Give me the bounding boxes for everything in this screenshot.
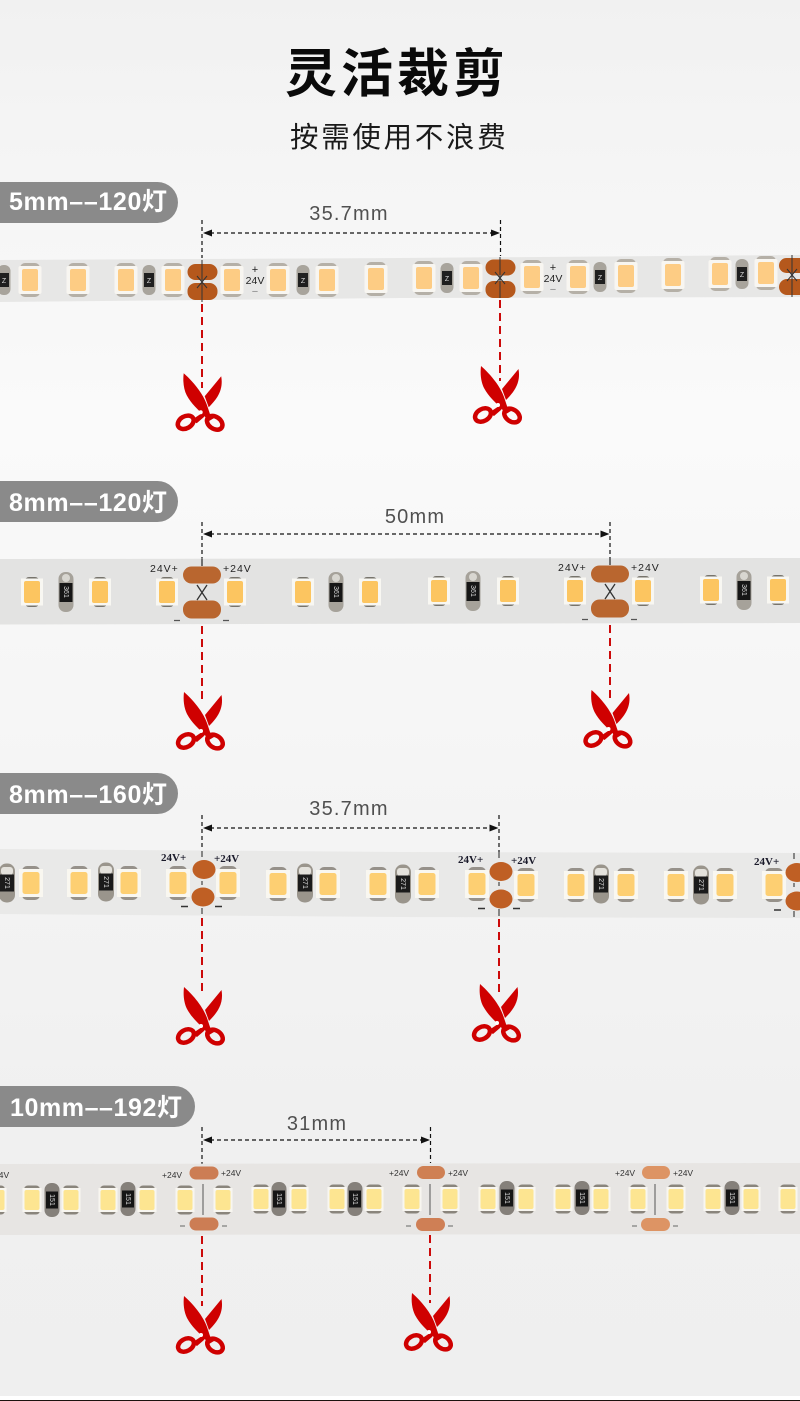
voltage labels: +24V [615,1168,635,1178]
copper pads [192,860,800,910]
LED strip 4 [0,1163,800,1235]
LEDs [21,575,789,607]
pill label: 8mm--160灯 [0,773,178,814]
voltage marks: 24V [544,273,562,285]
cut line and scissors right [583,625,633,749]
voltage labels [150,562,660,620]
resistors: 151 [351,1193,358,1205]
voltage labels: 24V+ [150,563,179,575]
pill label: 8mm--120灯: 8mm––120灯 [9,489,167,517]
resistors: Z [147,278,152,285]
LED strip 3 [0,849,800,918]
voltage labels: +24V [389,1168,409,1178]
voltage labels: 24V+ [458,854,483,866]
dimension: 31mm [202,1113,430,1164]
resistors: Z [598,275,603,282]
cut line and scissors left [175,304,225,433]
voltage labels: +24V [673,1168,693,1178]
resistors [0,259,748,295]
resistors: 271 [597,878,604,890]
resistors [44,1181,740,1217]
dimension: 50mm [202,506,610,559]
pill label: 10mm--192灯: 10mm––192灯 [10,1094,182,1122]
cut marks [197,255,797,302]
voltage marks: + [252,264,258,276]
section: 5mm 120 LEDs [0,182,800,433]
resistors: 151 [503,1192,510,1204]
resistors [0,862,709,904]
cut marks [202,851,794,917]
resistors: 361 [740,584,747,596]
voltage marks: 24V [246,275,264,287]
pill label: 5mm--120灯: 5mm––120灯 [9,188,167,216]
resistors: 271 [3,877,10,889]
voltage labels: 24V+ [161,852,186,864]
resistors: 271 [102,876,109,888]
LEDs [18,256,778,297]
voltage labels: +24V [448,1168,468,1178]
resistors: 361 [332,586,339,598]
dimension: 35.7mm [202,798,499,852]
voltage marks [246,262,562,298]
LED strip 2 [0,558,800,624]
resistors: 271 [399,878,406,890]
resistors: 151 [578,1192,585,1204]
resistors: 151 [728,1192,735,1204]
resistors: Z [445,276,450,283]
subtitle: 按需使用不浪费 [290,115,508,156]
LEDs [0,1184,798,1214]
dimension: 35.7mm [202,203,500,258]
cut line and scissors left [176,918,225,1046]
voltage labels: +24V [511,855,536,867]
resistors: 151 [48,1194,55,1206]
voltage labels: 24V+ [754,856,779,868]
section: 8mm 160 LEDs [0,773,800,1046]
cut line and scissors right [473,300,522,425]
section: 8mm 120 LEDs [0,481,800,751]
resistors: 271 [697,879,704,891]
voltage labels [161,852,781,910]
voltage labels: +24V [223,563,252,575]
LEDs [19,866,786,902]
voltage labels: +24V [214,853,239,865]
cut line and scissors right [472,919,521,1043]
voltage marks: + [550,262,556,274]
resistors: Z [301,278,306,285]
copper pads [190,1166,670,1231]
cut marks [203,1184,655,1215]
dimension: 35.7mm: 35.7mm [309,798,389,820]
pill label: 8mm--120灯 [0,481,178,522]
resistors: 361 [62,586,69,598]
voltage labels [0,1168,693,1226]
pill label: 8mm--160灯: 8mm––160灯 [9,781,167,809]
cut line and scissors left [176,1236,225,1355]
LED strip 1 [0,255,800,302]
resistors: 361 [469,585,476,597]
resistors: Z [740,272,745,279]
dimension: 31mm: 31mm [287,1113,347,1135]
resistors: 151 [124,1193,131,1205]
cut line and scissors left [176,626,225,751]
voltage labels: +24V [221,1168,241,1178]
voltage marks: − [550,284,556,296]
copper pads [188,258,800,300]
voltage labels: +24V [631,562,660,574]
resistors: Z [2,278,7,285]
section: 10mm 192 LEDs [0,1086,800,1355]
resistors [58,570,752,612]
voltage labels: 24V+ [558,562,587,574]
pill label: 10mm--192灯 [0,1086,195,1127]
copper pads [183,566,629,618]
resistors: 271 [301,877,308,889]
dimension: 35.7mm: 35.7mm [309,203,389,225]
title: 灵活裁剪 [285,32,509,107]
dimension: 50mm: 50mm [385,506,445,528]
pill label: 5mm--120灯 [0,182,178,223]
voltage labels: +24V [162,1170,182,1180]
resistors: 151 [275,1193,282,1205]
cut line and scissors right [404,1235,453,1352]
voltage marks: − [252,286,258,298]
cut marks [197,558,615,600]
